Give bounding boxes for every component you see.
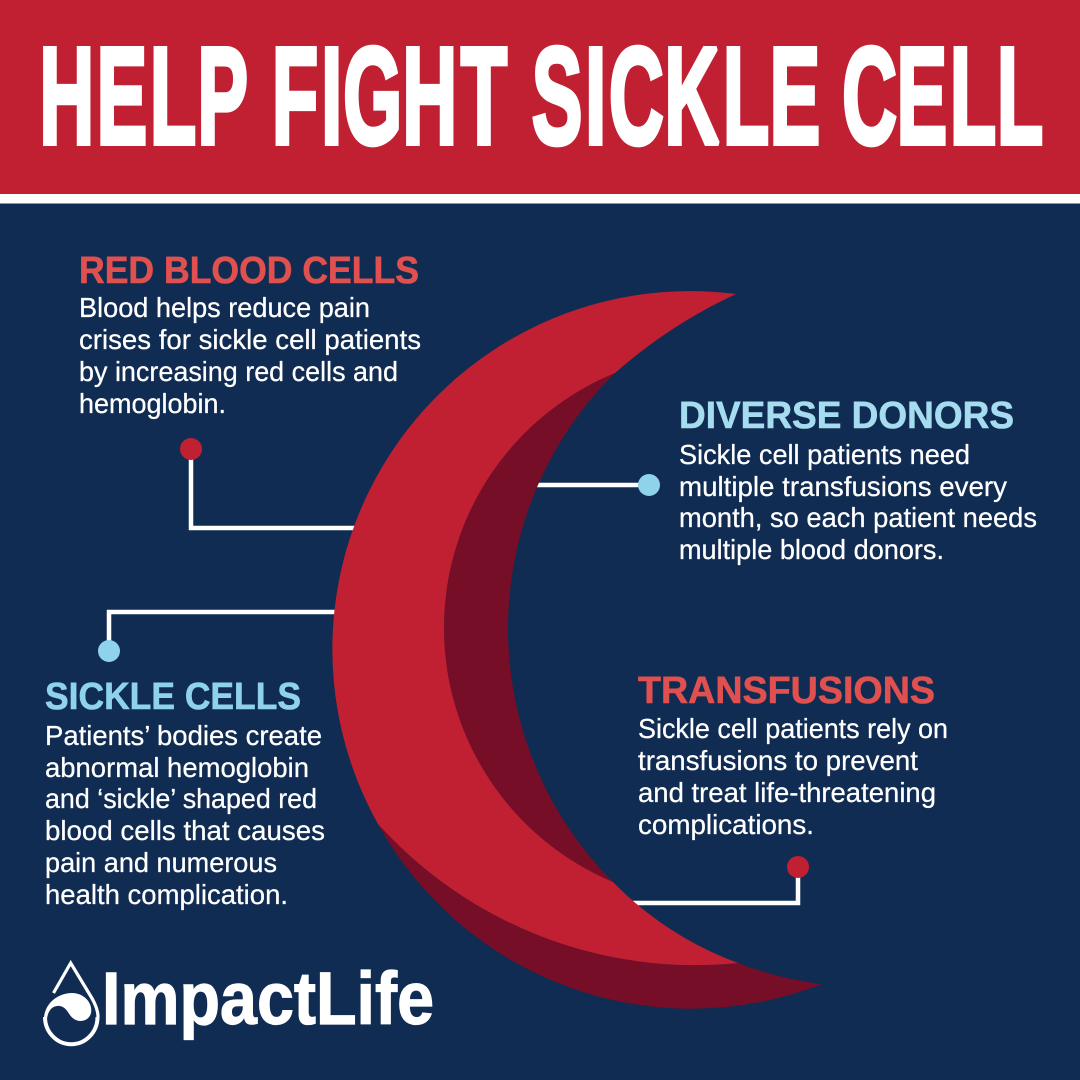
icon: blood drop [44, 963, 98, 1044]
body text: health complication. [45, 879, 288, 910]
connector: red blood cells [180, 438, 360, 528]
panel: diverse donors [679, 395, 1037, 565]
body text: hemoglobin. [79, 388, 226, 419]
body text [679, 439, 1037, 565]
body text: Blood helps reduce pain [79, 292, 370, 323]
body text: Patients’ bodies create [45, 720, 322, 751]
body text [79, 292, 421, 419]
body text [45, 720, 325, 910]
body text: transfusions to prevent [638, 745, 918, 776]
body text: abnormal hemoglobin [45, 752, 309, 783]
crescent lower shadow [378, 824, 822, 1009]
body text: month, so each patient needs [679, 502, 1037, 533]
body text: Sickle cell patients rely on [638, 713, 948, 744]
panel: red blood cells [79, 250, 421, 419]
heading: DIVERSE DONORS [679, 395, 1014, 437]
body text: multiple blood donors. [679, 534, 944, 565]
heading: TRANSFUSIONS [638, 670, 935, 712]
panel: sickle cells [45, 676, 325, 910]
title banner [0, 0, 1080, 204]
connector: sickle cells [98, 612, 340, 662]
body text: multiple transfusions every [679, 471, 1007, 502]
body text: by increasing red cells and [79, 356, 398, 387]
crescent inner shadow [444, 373, 615, 882]
sickle cell crescent [332, 291, 822, 1009]
body text: pain and numerous [45, 847, 277, 878]
heading: SICKLE CELLS [45, 676, 301, 718]
body text: complications. [638, 809, 814, 840]
body text: Sickle cell patients need [679, 439, 970, 470]
title: HELP FIGHT SICKLE CELL [39, 18, 1043, 173]
body text: and treat life-threatening [638, 777, 936, 808]
body text: crises for sickle cell patients [79, 324, 421, 355]
body text [638, 713, 948, 840]
panel: transfusions [638, 670, 948, 840]
body text: blood cells that causes [45, 815, 325, 846]
connector: transfusions [630, 856, 809, 903]
logo: ImpactLife [44, 957, 434, 1044]
connector: diverse donors [530, 474, 660, 496]
body text: and ‘sickle’ shaped red [45, 783, 317, 814]
wordmark: ImpactLife [102, 957, 434, 1040]
heading: RED BLOOD CELLS [79, 250, 419, 292]
crescent main body [332, 291, 738, 965]
